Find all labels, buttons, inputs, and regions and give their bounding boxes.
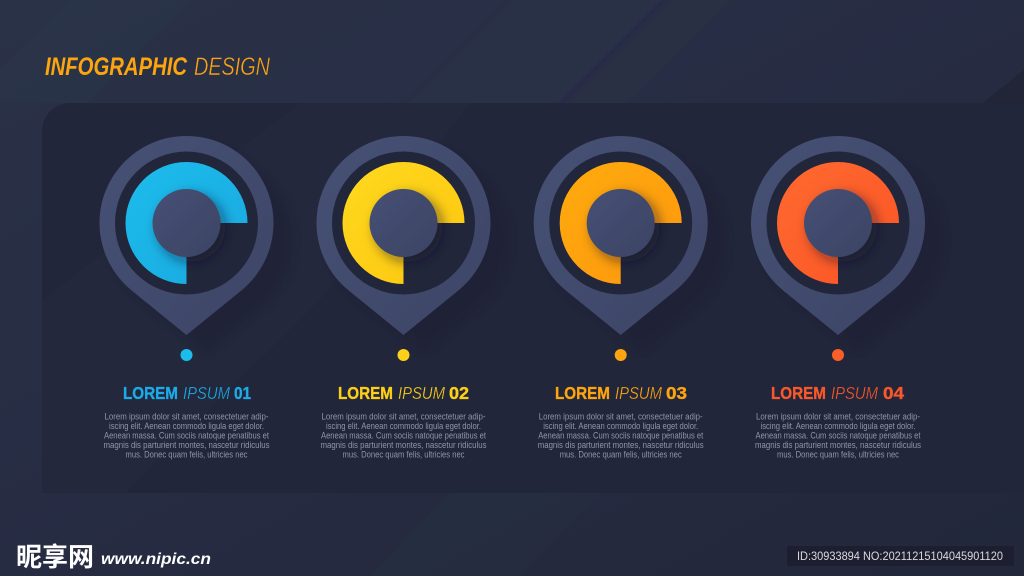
pin shadow <box>543 145 728 353</box>
body text: magnis dis parturient montes, nascetur ridiculus <box>755 440 922 450</box>
body text: mus. Donec quam felis, ultricies nec <box>777 450 900 460</box>
body text: mus. Donec quam felis, ultricies nec <box>342 450 465 460</box>
title: INFOGRAPHIC <box>45 53 188 81</box>
body text: magnis dis parturient montes, nascetur ridiculus <box>538 440 704 450</box>
body text <box>538 412 704 460</box>
marker dot <box>615 349 627 361</box>
marker dot <box>832 349 844 361</box>
heading: 04 <box>883 383 904 403</box>
panel backdrop <box>42 103 1024 493</box>
progress arc <box>560 162 682 284</box>
watermark logo <box>16 542 211 572</box>
body text: Aenean massa. Cum sociis natoque penatibus et <box>756 430 921 440</box>
body text: mus. Donec quam felis, ultricies nec <box>560 450 682 460</box>
pin body <box>316 136 490 335</box>
body text: Lorem ipsum dolor sit amet, consectetuer adip- <box>322 412 486 422</box>
heading <box>555 383 687 403</box>
panel: step 01 <box>100 136 294 460</box>
heading <box>123 383 251 403</box>
pin well <box>115 152 258 294</box>
body text: Aenean massa. Cum sociis natoque penatibus et <box>538 430 704 440</box>
marker dot <box>398 349 410 361</box>
pin shadow <box>325 145 510 353</box>
heading: LOREM <box>771 383 826 403</box>
body text <box>755 412 922 460</box>
body text <box>320 412 487 460</box>
progress arc <box>125 162 248 284</box>
pin body <box>751 136 925 335</box>
body text: Aenean massa. Cum sociis natoque penatibus et <box>104 430 269 440</box>
pin shadow <box>760 145 945 353</box>
body text: iscing elit. Aenean commodo ligula eget dolor. <box>760 421 916 431</box>
image id stamp <box>787 546 1014 566</box>
pin hub <box>804 189 872 257</box>
heading: IPSUM <box>398 383 445 403</box>
title: DESIGN <box>194 53 271 81</box>
body text <box>104 412 270 460</box>
marker dot <box>180 349 192 361</box>
watermark logo: www.nipic.cn <box>101 551 211 568</box>
pin body <box>100 136 274 335</box>
pin well <box>332 152 475 294</box>
heading: 01 <box>234 383 251 403</box>
progress arc <box>777 162 899 284</box>
panel: step 03 <box>534 136 728 460</box>
panel diagonal sheen <box>42 103 470 493</box>
heading <box>771 383 904 403</box>
heading: IPSUM <box>183 383 230 403</box>
body text: Lorem ipsum dolor sit amet, consectetuer adip- <box>756 412 920 422</box>
body text: Aenean massa. Cum sociis natoque penatibus et <box>321 430 486 440</box>
body text: magnis dis parturient montes, nascetur ridiculus <box>104 440 270 450</box>
body text: iscing elit. Aenean commodo ligula eget dolor. <box>109 421 264 431</box>
heading: 02 <box>449 383 469 403</box>
heading: 03 <box>666 383 687 403</box>
pin hub <box>152 189 220 257</box>
panel: step 04 <box>751 136 945 460</box>
pin body <box>534 136 708 335</box>
pin well <box>766 152 910 294</box>
body text: mus. Donec quam felis, ultricies nec <box>126 450 248 460</box>
pin hub <box>370 189 438 257</box>
body text: iscing elit. Aenean commodo ligula eget dolor. <box>326 421 481 431</box>
body text: magnis dis parturient montes, nascetur ridiculus <box>320 440 487 450</box>
body text: Lorem ipsum dolor sit amet, consectetuer adip- <box>104 412 269 422</box>
pin hub <box>587 189 655 257</box>
heading: LOREM <box>555 383 610 403</box>
image id stamp: ID:30933894 NO:20211215104045901120 <box>797 549 1003 563</box>
progress arc <box>342 162 464 284</box>
watermark logo: 昵享网 <box>16 542 94 572</box>
heading <box>338 383 469 403</box>
pin shadow <box>109 145 294 353</box>
body text: iscing elit. Aenean commodo ligula eget dolor. <box>543 421 698 431</box>
pin well <box>549 152 692 294</box>
heading: LOREM <box>123 383 178 403</box>
heading: IPSUM <box>615 383 662 403</box>
heading: LOREM <box>338 383 393 403</box>
body text: Lorem ipsum dolor sit amet, consectetuer adip- <box>539 412 703 422</box>
heading: IPSUM <box>831 383 878 403</box>
panel: step 02 <box>316 136 510 460</box>
